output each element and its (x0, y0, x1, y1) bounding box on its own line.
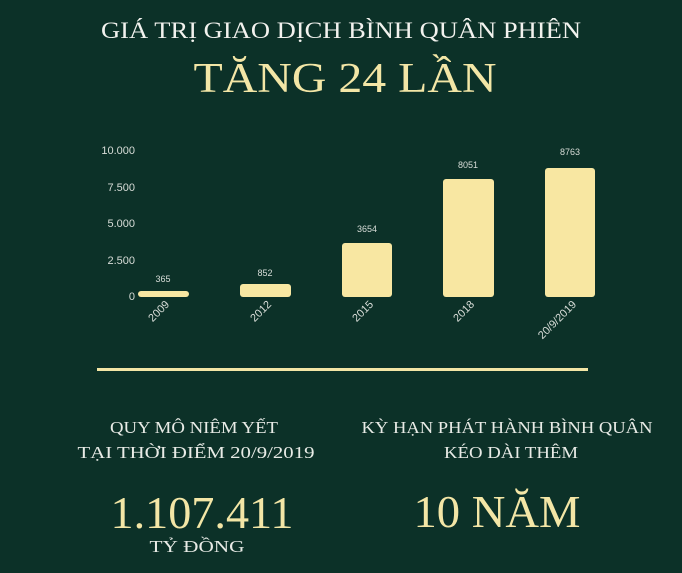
bar chart: 2009 (146, 299, 172, 324)
bar chart: 8051 (458, 160, 478, 170)
bar chart (101, 145, 595, 342)
bar chart: 10.000 (101, 145, 135, 157)
bar chart: 20/9/2019 (536, 299, 579, 342)
title: GIÁ TRỊ GIAO DỊCH BÌNH QUÂN PHIÊN (101, 18, 581, 43)
stat: issuance term: KÉO DÀI THÊM (444, 443, 578, 462)
bar chart: 852 (257, 268, 273, 278)
bar chart: 2012 (248, 299, 274, 324)
stat: listing scale: 1.107.411 (110, 487, 294, 538)
stat: listing scale (78, 418, 314, 556)
bar chart: 3654 (357, 224, 377, 234)
bar chart: 2.500 (107, 255, 135, 267)
bar chart: 2015 (350, 299, 376, 324)
bar chart: 365 (155, 274, 171, 284)
bar chart: 8763 (560, 147, 580, 157)
stat: issuance term (362, 418, 652, 537)
stat: issuance term: KỲ HẠN PHÁT HÀNH BÌNH QUÂN (362, 418, 652, 437)
stat: listing scale: QUY MÔ NIÊM YẾT (110, 418, 279, 437)
stat: listing scale: TẠI THỜI ĐIỂM 20/9/2019 (78, 443, 314, 462)
bar chart: 2018 (451, 299, 477, 324)
bar chart: 5.000 (107, 218, 135, 230)
bar chart: 7.500 (107, 182, 135, 194)
stat: listing scale: TỶ ĐỒNG (150, 537, 244, 556)
title (101, 18, 581, 102)
title: TĂNG 24 LẦN (194, 54, 496, 102)
stat: issuance term: 10 NĂM (414, 486, 580, 537)
bar chart: 0 (129, 291, 135, 303)
